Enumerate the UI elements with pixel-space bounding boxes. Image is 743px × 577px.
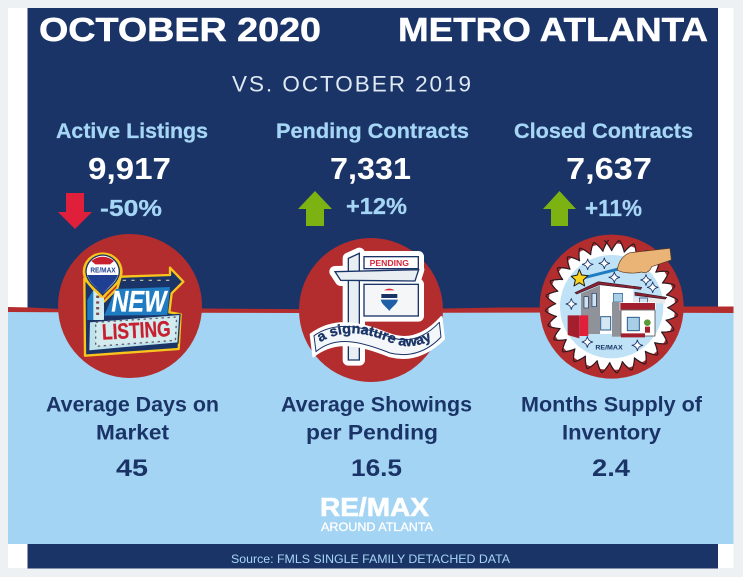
stat: active listings — [56, 120, 208, 229]
icon: new listing sign: LISTING — [101, 316, 171, 345]
stat: pending contracts: Pending Contracts — [276, 120, 469, 143]
metric: months supply of inventory: Months Supply of — [521, 394, 703, 416]
icon: new listing sign: RE/MAX — [90, 265, 116, 274]
subheading: VS. OCTOBER 2019 — [232, 72, 471, 96]
metric: months supply of inventory — [521, 394, 703, 482]
metric: average days on market: 45 — [116, 455, 148, 482]
icon: house with magic wand: RE/MAX — [595, 346, 623, 352]
stat: closed contracts: 7,637 — [566, 151, 652, 186]
metric: average showings per pending: 16.5 — [351, 455, 402, 482]
metric: average showings per pending — [281, 394, 472, 482]
source bar — [28, 544, 718, 568]
stat: closed contracts — [514, 120, 693, 226]
stat: active listings: 9,917 — [88, 151, 171, 186]
metric: average days on market: Market — [96, 422, 169, 444]
metric: average days on market — [46, 394, 219, 482]
logo: RE/MAX Around Atlanta: AROUND ATLANTA — [321, 520, 433, 534]
source bar: Source: FMLS SINGLE FAMILY DETACHED DATA — [231, 552, 510, 566]
icon: red down arrow — [58, 193, 92, 229]
logo: RE/MAX Around Atlanta — [320, 492, 433, 534]
stat: active listings: -50% — [100, 195, 162, 221]
icon: new listing sign — [58, 234, 202, 378]
metric: average showings per pending: per Pending — [306, 422, 438, 444]
icon: pending sign with ribbon — [299, 238, 445, 382]
stat: pending contracts: 7,331 — [330, 151, 411, 186]
stat: pending contracts: +12% — [346, 193, 407, 219]
heading: Metro Atlanta: METRO ATLANTA — [398, 11, 708, 48]
metric: months supply of inventory: 2.4 — [592, 455, 631, 482]
metric: average showings per pending: Average Showings — [281, 394, 472, 416]
panel: light blue lower background — [8, 312, 734, 544]
icon: green up arrow — [543, 191, 576, 226]
stat: closed contracts: +11% — [585, 195, 642, 221]
icon: new listing sign: NEW — [111, 286, 168, 319]
metric: months supply of inventory: Inventory — [562, 422, 661, 444]
panel: navy upper background — [28, 8, 718, 312]
stat: active listings: Active Listings — [56, 120, 208, 143]
icon: pending sign with ribbon: a signature away — [318, 324, 430, 346]
stat: pending contracts — [276, 120, 469, 226]
icon: pending sign with ribbon: PENDING — [370, 259, 409, 268]
heading: October 2020: OCTOBER 2020 — [39, 11, 321, 48]
stat: closed contracts: Closed Contracts — [514, 120, 693, 143]
icon: house with magic wand — [540, 235, 684, 379]
logo: RE/MAX Around Atlanta: RE/MAX — [320, 492, 430, 522]
metric: average days on market: Average Days on — [46, 394, 219, 416]
red wavy divider — [8, 306, 734, 313]
icon: green up arrow — [298, 191, 332, 226]
